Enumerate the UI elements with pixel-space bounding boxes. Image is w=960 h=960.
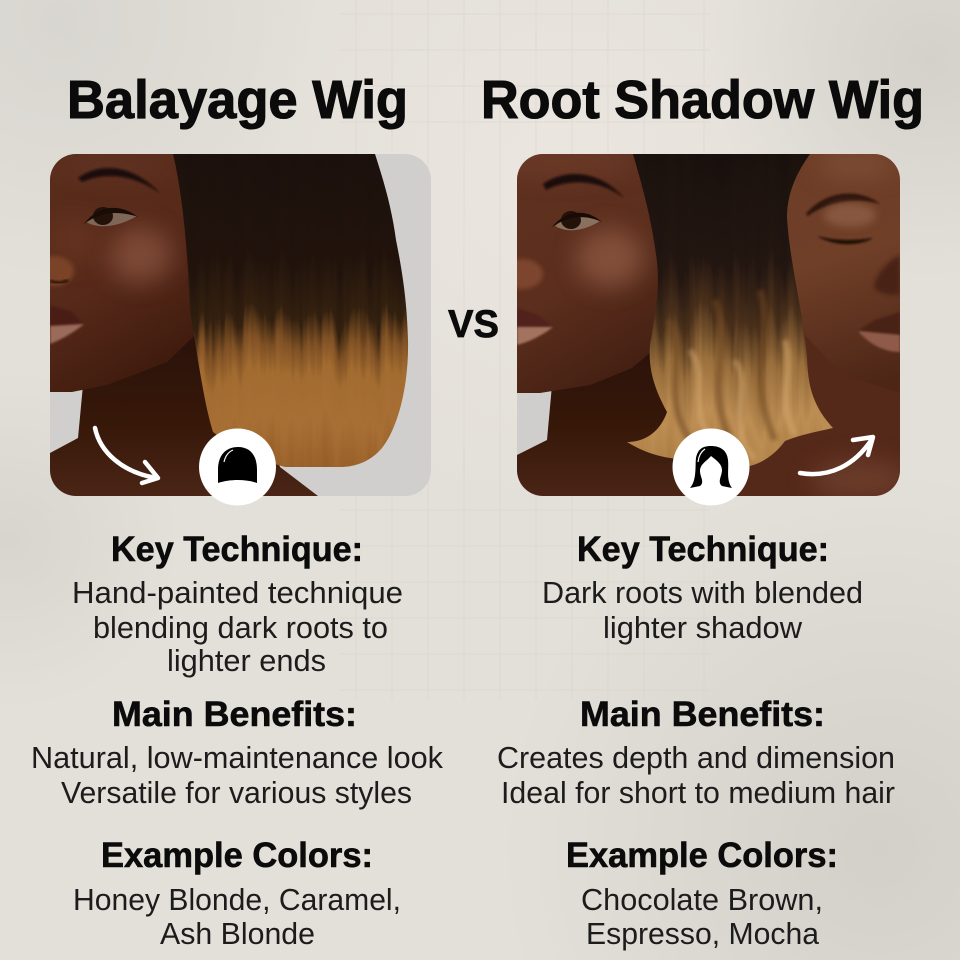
panel: balayage photo bbox=[50, 154, 431, 506]
icon: wavy wig badge bbox=[672, 428, 750, 506]
text block: balayage example colors bbox=[73, 836, 401, 951]
nose bbox=[50, 255, 75, 288]
color list: Honey Blonde, Caramel, bbox=[73, 883, 401, 917]
eye brow bbox=[78, 168, 160, 193]
eye bbox=[86, 213, 137, 226]
neck and shoulder bbox=[50, 320, 318, 496]
benefits list: Natural, low-maintenance look bbox=[31, 741, 444, 775]
description: blending dark roots to bbox=[93, 611, 388, 645]
hair bbox=[173, 154, 408, 467]
color list: Espresso, Mocha bbox=[586, 917, 819, 951]
heading: example colors: Example Colors: bbox=[101, 836, 373, 875]
description bbox=[542, 576, 863, 645]
benefits list: Versatile for various styles bbox=[61, 776, 412, 810]
benefits list: Ideal for short to medium hair bbox=[501, 776, 895, 810]
benefits list bbox=[31, 741, 444, 810]
label: VS: VS bbox=[448, 303, 499, 346]
title: Balayage Wig: Balayage Wig bbox=[67, 70, 408, 130]
heading: key technique: Key Technique: bbox=[111, 530, 363, 569]
hair bbox=[627, 154, 833, 466]
left nose bbox=[517, 258, 544, 290]
description: lighter ends bbox=[167, 644, 326, 678]
left face bbox=[517, 154, 670, 393]
text block: root shadow main benefits bbox=[497, 695, 895, 810]
lips bbox=[50, 305, 81, 326]
benefits list bbox=[497, 741, 895, 810]
icon: straight wig badge bbox=[199, 428, 276, 506]
title: Root Shadow Wig: Root Shadow Wig bbox=[481, 70, 924, 130]
panel: root shadow photo bbox=[517, 154, 900, 506]
text block: root shadow key technique bbox=[542, 530, 863, 645]
brow bbox=[543, 174, 624, 198]
color list: Ash Blonde bbox=[160, 917, 315, 951]
left lips bbox=[517, 309, 548, 326]
right face bbox=[780, 154, 900, 393]
necks bbox=[517, 352, 740, 496]
color list: Chocolate Brown, bbox=[581, 883, 823, 917]
arrow bbox=[95, 428, 158, 483]
heading: key technique: Key Technique: bbox=[577, 530, 829, 569]
heading: main benefits: Main Benefits: bbox=[112, 695, 357, 734]
color list bbox=[581, 883, 823, 951]
description: lighter shadow bbox=[603, 611, 803, 645]
color list bbox=[73, 883, 401, 951]
description bbox=[72, 576, 403, 678]
benefits list: Creates depth and dimension bbox=[497, 741, 895, 775]
heading: main benefits: Main Benefits: bbox=[580, 695, 825, 734]
text block: root shadow example colors bbox=[566, 836, 838, 951]
description: Dark roots with blended bbox=[542, 576, 863, 610]
text block: balayage main benefits bbox=[31, 695, 444, 810]
left eye bbox=[555, 215, 600, 230]
description: Hand-painted technique bbox=[72, 576, 403, 610]
heading: example colors: Example Colors: bbox=[566, 836, 838, 875]
text block: balayage key technique bbox=[72, 530, 403, 678]
arrow bbox=[800, 437, 873, 474]
